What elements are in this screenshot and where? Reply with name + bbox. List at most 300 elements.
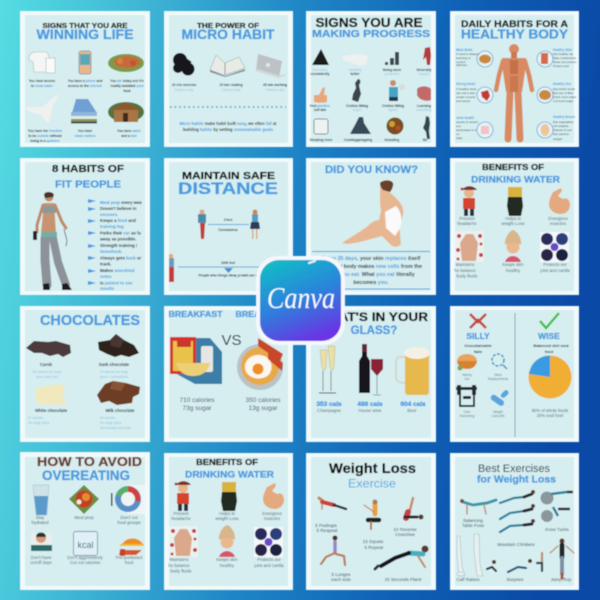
- text: balanced diet: [533, 343, 569, 354]
- captions row three: Sleeping more: [310, 138, 333, 142]
- icon: runner: [423, 116, 430, 139]
- text: plank: 15 Seconds Plank: [384, 577, 422, 582]
- heading: weight loss: Weight Loss: [329, 460, 416, 476]
- icon: food groups plate: [111, 485, 145, 514]
- text: champagne: Champagne: [317, 408, 342, 413]
- icon: open hand: [25, 94, 59, 122]
- captions row two: Feel positive: [310, 104, 330, 108]
- captions: top row: [457, 216, 569, 226]
- captions: upper fads: Meal: [495, 373, 502, 377]
- icon: champagne glasses: [319, 346, 336, 393]
- text: house wine: 498 cals: [357, 401, 383, 408]
- captions: repeat top row: weight Loss: [215, 516, 239, 521]
- icon: meal plate: [69, 485, 99, 514]
- text: habit list: Meal prep every wee: [100, 200, 142, 205]
- text: habit list: excuses.: [100, 212, 118, 217]
- caption row two: You have: [78, 129, 92, 133]
- text: balanced diet: food: [545, 349, 554, 354]
- captions row two: tighter: [389, 108, 398, 112]
- heading: did you know: DID YOU KNOW?: [325, 164, 418, 176]
- captions: exercises: 15 min reading: [219, 83, 243, 87]
- icon: person bottom left: [169, 254, 174, 282]
- icon: headache boy: [460, 186, 477, 216]
- panel: benefits of drinking water, top: [450, 158, 579, 295]
- text: unsustainable fads: Unsustainable: [464, 343, 492, 348]
- text: left column: control: [456, 60, 466, 64]
- text: habit list: Always gets back or: [100, 256, 142, 260]
- text: beer: 604 cals: [400, 401, 426, 408]
- captions: overeating top: food groups: [117, 520, 141, 525]
- caption row one: readily available your: [110, 84, 144, 88]
- text: left calories: 73g sugar: [183, 405, 212, 412]
- text: habit list: training log.: [100, 224, 125, 229]
- heading: avoid overeating: OVEREATING: [42, 468, 130, 483]
- captions: lower fads: [460, 410, 505, 418]
- text: dark chocolate: 74 calories per large: [100, 370, 129, 374]
- caption row one: to clean water: [31, 84, 54, 88]
- icon: milk chocolate: [97, 381, 140, 405]
- text: milk chocolate: Not actually chocolate: [100, 426, 131, 430]
- captions: repeat bottom row: Keeps skin: [216, 557, 238, 562]
- icon: man lifting: [389, 80, 405, 101]
- captions: top row: Energizes: [548, 216, 569, 221]
- icon: body with red cells: [455, 231, 484, 262]
- text: left column: on: [456, 132, 460, 136]
- panel: best exercises: [450, 453, 579, 590]
- text: micro habit note: [179, 121, 277, 132]
- icon: woman at desk: [350, 117, 371, 134]
- captions row three: [310, 138, 427, 142]
- panel: avoid overeating: [20, 452, 150, 590]
- caption row two: to be outside without: [28, 134, 62, 138]
- captions: repeat bottom row: Maintains: [170, 557, 189, 562]
- captions: upper fads: Skinny: [462, 373, 472, 377]
- icon: phone: [79, 51, 91, 74]
- panel: safe distance: [164, 158, 293, 295]
- text: lunges: 5 Lunges: [332, 572, 351, 577]
- icon: weight loss pills: [490, 389, 510, 407]
- icon: person left: [198, 210, 206, 239]
- icon: person in bed: [31, 532, 52, 551]
- distance marker: short: Coronavirus: [218, 228, 238, 232]
- text: left column: [456, 48, 479, 140]
- text: pie legend: 20% soul food: [537, 413, 564, 418]
- text: habit list: track.: [100, 262, 111, 266]
- heading: drinking water repeat: DRINKING WATER: [185, 470, 274, 480]
- captions: top row: weight Loss: [501, 221, 525, 226]
- captions: overeating bottom: Cut out calories: [70, 560, 101, 565]
- heading: healthy body: [461, 19, 568, 42]
- text: unsustainable fads: fads: [474, 349, 483, 354]
- captions: repeat bottom row: Protects our: [257, 557, 281, 562]
- label: vs: VS: [221, 332, 242, 349]
- heading: fit people: FIT PEOPLE: [55, 178, 121, 190]
- icons: organs: [479, 53, 551, 136]
- text: exercise labels: Jump Rop: [551, 577, 572, 582]
- text: right column: Healthy Bones: [553, 115, 575, 119]
- captions: lower fads: Exercising: [460, 414, 475, 418]
- text: left calories: [179, 397, 215, 412]
- captions: overeating top: hydrated: [31, 520, 49, 525]
- text: skin fact: becomes you.: [353, 280, 389, 286]
- figure: balancing table pose: [460, 499, 496, 514]
- captions row three: Including: [385, 138, 399, 142]
- captions row two: self talk: [314, 108, 326, 112]
- text: left calories: 710 calories: [179, 397, 215, 404]
- captions: repeat top row: muscles: [264, 516, 281, 521]
- icon: dancer: [423, 47, 431, 65]
- captions row three: Cooking/prepping: [344, 138, 372, 142]
- text: exercise labels: [456, 577, 572, 582]
- icon: flexed bicep: [549, 188, 570, 214]
- icon: egg and bacon plate: [237, 338, 283, 390]
- icon: water glass: [33, 485, 49, 515]
- captions row one: Being more: [383, 68, 401, 72]
- heading: drinking water: DRINKING WATER: [471, 174, 560, 186]
- caption row one: You have access: [29, 79, 55, 83]
- text: table pose: Table Pose: [462, 523, 485, 528]
- captions: overeating top: Don't cut: [120, 515, 138, 520]
- text: right column: Cut food sugar: [553, 99, 573, 103]
- captions row two: looser: [353, 108, 362, 112]
- icon: woman lifting: [352, 79, 361, 102]
- icon: dumbbells: [173, 53, 194, 76]
- distance marker: long: People who things whay prolaih are sd: [199, 274, 259, 278]
- heading: fit people: [52, 163, 125, 190]
- text: dark chocolate: [99, 362, 130, 379]
- text: mountain climbers: Mountain Climbers: [497, 542, 536, 547]
- text: left column: can eat a lean: [456, 91, 476, 95]
- heading: drinking water: [471, 162, 560, 186]
- figure: knee tucks: [540, 492, 573, 522]
- text: left column: create muscle: [456, 95, 476, 99]
- captions: repeat top row: Prevent: [173, 511, 189, 516]
- text: left column: Joint Health: [456, 116, 474, 120]
- icon: beer mug: [396, 347, 430, 395]
- heading: avoid overeating: HOW TO AVOID: [37, 455, 142, 469]
- icon: joint cells: [540, 232, 569, 262]
- captions row one: better: [350, 72, 360, 76]
- text: left column: Strong Heart: [456, 82, 476, 86]
- icon: laptop: [256, 54, 287, 78]
- caption row two: You have water: [117, 129, 142, 133]
- text: balanced diet: Balanced diet soul: [533, 343, 569, 348]
- captions row three: Be: [423, 138, 427, 142]
- text: habit list: Parks their car as fa: [100, 230, 141, 236]
- text: unsustainable fads: [464, 343, 492, 354]
- caption row one: access to the internet: [68, 84, 103, 88]
- captions: repeat top row: [171, 511, 283, 521]
- distance marker: long: [178, 261, 290, 278]
- distance marker: short: [208, 218, 249, 232]
- figure: plank: [375, 546, 428, 569]
- captions: exercises: [172, 83, 287, 92]
- text: pie legend: [532, 408, 568, 418]
- illustration: seated woman: [342, 180, 403, 247]
- icon: thumbs up: [314, 87, 327, 103]
- chart: whole foods pie: [528, 356, 572, 398]
- heading: silly: SILLY: [466, 331, 490, 341]
- panel: healthy body: [450, 11, 579, 147]
- captions row two: Clothes fitting: [346, 104, 368, 108]
- icon: served dome: [119, 538, 144, 556]
- heading: micro habit: THE POWER OF: [197, 21, 260, 30]
- heading: chocolates: CHOCOLATES: [40, 313, 140, 329]
- text: right column: Eat calcium: [553, 132, 569, 136]
- text: knee tucks: Knee Tucks: [545, 527, 570, 532]
- figure: burpees: [487, 553, 542, 572]
- text: left column: A mind is always: [456, 52, 479, 56]
- icon: body repeat: [169, 526, 198, 557]
- text: white chocolate: White chocolate: [35, 408, 68, 413]
- text: right column: Eat healthy fat: [553, 52, 573, 56]
- caption row two: [28, 129, 142, 143]
- captions: overeating top: Stay: [36, 515, 45, 520]
- text: reverse crunches: [393, 527, 417, 537]
- captions: top row: headache: [457, 221, 477, 226]
- captions: top row: Prevent: [459, 216, 475, 221]
- text: carob: Carob: [40, 362, 52, 367]
- captions row two: something: [417, 108, 432, 112]
- logo wordmark: Canva: [267, 280, 335, 315]
- captions: repeat top row: Energizes: [262, 511, 283, 516]
- captions: exercises: 3 times a day: [222, 88, 241, 92]
- panel: what's in your glass: [306, 306, 436, 442]
- panel: micro habit: [164, 11, 293, 147]
- text: table pose: Balancing: [463, 518, 483, 523]
- icon: dark chocolate: [98, 334, 139, 357]
- captions: exercises: 10 min exercise: [172, 83, 196, 87]
- text: left column: stillness: [456, 63, 467, 67]
- heading: making progress: SIGNS YOU ARE: [316, 16, 422, 30]
- text: habit list: Is patient to see: [100, 280, 133, 286]
- captions: top row: muscles: [550, 221, 567, 226]
- text: right column: Eat vegetables: [553, 120, 574, 124]
- text: left column: you: [456, 124, 461, 128]
- figure: pushups: [319, 498, 346, 509]
- panel: breakfast vs: [164, 306, 293, 442]
- figure: jump rope: [550, 538, 574, 578]
- panel: chocolates: [20, 306, 150, 442]
- icon: kcal: kcal: [77, 540, 94, 550]
- icon: meal replacement loop: [492, 354, 507, 369]
- captions: bottom row: healthy: [506, 268, 521, 273]
- panel: fit people: [20, 158, 150, 295]
- captions: bottom row: [454, 262, 570, 278]
- icon: food plate: [108, 54, 144, 72]
- heading: best exercises: for Weight Loss: [477, 474, 556, 486]
- icon: joint cells repeat: [254, 527, 283, 557]
- heading: wise: WISE: [538, 331, 560, 341]
- captions: lower fads: Loss pills: [491, 414, 505, 418]
- text: reverse crunches: Crunches: [395, 532, 416, 537]
- text: exercise labels: Burpees: [507, 577, 524, 582]
- text: right column: Vitamin D sun: [553, 128, 572, 132]
- text: white chocolate: 67 calories: [28, 416, 44, 420]
- text: table pose: [462, 518, 485, 528]
- text: habit list: Doesn't believe in: [100, 206, 137, 211]
- icon: brain: [417, 86, 431, 101]
- icon: bicep repeat: [263, 483, 284, 509]
- captions: overeating bottom: Pre-portioned: [116, 555, 143, 560]
- text: right column: Healthy Skin: [553, 48, 572, 52]
- captions: bottom row: body fluids: [456, 274, 478, 278]
- text: left column: daily: [456, 136, 463, 140]
- text: milk chocolate: 56 calories: [100, 416, 116, 420]
- icon: waist repeat: [221, 482, 237, 511]
- captions: top row: Helps in: [505, 216, 521, 221]
- icon: wine bottle and glass: [359, 344, 383, 395]
- heading: what's in your glass: GLASS?: [351, 325, 397, 337]
- captions: overeating bottom: Don't have: [31, 555, 52, 560]
- icon: folded clothes: [71, 99, 97, 124]
- icon: headache boy repeat: [174, 481, 191, 511]
- text: squats: 15 Squats: [363, 539, 384, 544]
- icon: scale: [314, 119, 328, 134]
- icon: house: [108, 102, 144, 122]
- text: right calories: [245, 397, 281, 412]
- text: champagne: [316, 401, 342, 413]
- heading: best exercises: Best Exercises: [478, 463, 550, 475]
- caption row two: and a bed: [121, 134, 137, 138]
- text: habit list: Makes anecdotal: [100, 268, 134, 273]
- caption row one: You have a phone and: [68, 79, 102, 83]
- text: white chocolate: Per large piece: [28, 421, 50, 425]
- text: left column: learning to: [456, 56, 471, 60]
- icon: red cross: [470, 314, 486, 328]
- heading: healthy body: HEALTHY BODY: [461, 26, 568, 42]
- panel: making progress: [306, 11, 436, 147]
- captions: repeat top row: headache: [171, 516, 191, 521]
- text: right column: Wear sun protect: [553, 60, 577, 64]
- illustration: woman with jump rope: [33, 192, 72, 290]
- text: exercise labels: Calf Raises: [456, 577, 480, 582]
- panel: winning life: [20, 11, 150, 147]
- text: beer: Beer: [407, 408, 417, 413]
- captions row two: Learning: [417, 104, 431, 108]
- text: right column: Lift weights: [553, 124, 569, 128]
- figure: squats: [364, 500, 379, 529]
- captions: bottom row: Maintains: [456, 262, 475, 267]
- icon: woman with towel: [505, 230, 521, 262]
- text: house wine: [357, 401, 383, 413]
- caption row two: clean clothes: [75, 134, 96, 138]
- captions: repeat top row: Helps in: [219, 511, 235, 516]
- text: carob: 56 calories per large: [33, 370, 62, 374]
- text: habit list: notes: [100, 274, 112, 279]
- heading: fit people: 8 HABITS OF: [52, 163, 125, 175]
- figure: mountain climbers: [500, 490, 535, 532]
- text: pie legend: 80% of whole foods: [532, 408, 568, 413]
- heading: making progress: [312, 16, 430, 40]
- distance marker: long: 1000 feet: [221, 261, 236, 265]
- captions: repeat bottom row: [168, 557, 284, 574]
- captions: upper fads: [462, 373, 509, 381]
- panel: silly vs wise: [450, 306, 579, 442]
- captions: bottom row: Protects our: [543, 262, 567, 267]
- text: skin fact: food you eat. What you eat literally: [327, 272, 415, 278]
- text: house wine: House wine: [359, 408, 382, 413]
- icon: green check: [540, 313, 559, 328]
- text: habit list: timeshock.: [100, 249, 122, 254]
- captions: exercises: 45 min working: [263, 83, 287, 87]
- captions: bottom row: Keeps skin: [502, 262, 524, 267]
- heading: making progress: MAKING PROGRESS: [312, 28, 430, 40]
- text: habit list: [100, 200, 142, 291]
- text: habit list: Keeps a food and: [100, 218, 136, 223]
- text: reverse crunches: 10 Reverse: [393, 527, 417, 532]
- captions: overeating bottom: on/off days: [30, 560, 53, 565]
- icon: white chocolate: [35, 384, 67, 405]
- caption row one: You ate today and it's: [110, 79, 144, 83]
- heading: safe distance: MAINTAIN SAFE: [182, 171, 275, 182]
- text: carob: [33, 362, 62, 379]
- distance marker: short: 3 feet: [224, 218, 233, 222]
- text: habit list: away as possible.: [100, 236, 136, 242]
- icon: white cloth: [343, 54, 368, 66]
- text: dark chocolate: piece + antioxidants: [100, 375, 129, 379]
- panel: did you know: [306, 158, 436, 295]
- captions: lower fads: Weight: [493, 410, 503, 414]
- heading: drinking water: BENEFITS OF: [482, 162, 544, 172]
- captions: overeating bottom: [30, 555, 143, 565]
- icon: carob: [26, 341, 71, 357]
- text: right column: [553, 48, 577, 141]
- icon: skinny tea: [457, 354, 477, 370]
- text: left column: and stress: [456, 99, 471, 103]
- heading: avoid overeating: [20, 452, 150, 483]
- text: left column: A healthy heart: [456, 87, 477, 91]
- text: beer: [400, 401, 426, 413]
- heading: safe distance: DISTANCE: [178, 180, 278, 198]
- heading: winning life: WINNING LIFE: [36, 26, 134, 42]
- captions row two: [310, 104, 432, 112]
- text: milk chocolate: Per large piece: [100, 421, 122, 425]
- text: lunges: [331, 572, 351, 582]
- heading: winning life: SIGNS THAT YOU ARE: [42, 21, 128, 30]
- text: lunges: each side: [331, 577, 351, 582]
- icon: barbell station: [456, 385, 477, 407]
- captions row one: Generally: [416, 68, 432, 72]
- heading: breakfast right: BREAKFAST: [236, 310, 290, 319]
- heading: best exercises: [477, 463, 556, 486]
- text: right calories: 350 calories: [245, 397, 281, 404]
- text: right column: weight: [553, 137, 562, 141]
- text: milk chocolate: Milk chocolate: [106, 408, 135, 413]
- captions: repeat bottom row: healthy: [220, 563, 235, 568]
- text: left column: advantage to it: [456, 128, 476, 132]
- text: left column: squats & stretch: [456, 120, 478, 124]
- text: carob: piece dairy free: [36, 375, 58, 379]
- text: right column: Eat lots of fiber: [553, 91, 574, 95]
- caption row one: food: [123, 89, 131, 93]
- text: right calories: 13g sugar: [249, 405, 278, 412]
- text: pushups: [315, 523, 338, 533]
- captions row one: [310, 68, 432, 76]
- text: pushups: 5 Respeat: [317, 528, 338, 533]
- heading: drinking water repeat: BENEFITS OF: [196, 457, 258, 467]
- text: habit list: results: [100, 286, 115, 291]
- icon: waist with tape: [507, 187, 523, 216]
- heading: safe distance: [178, 171, 278, 198]
- captions: bottom row: he balance: [454, 268, 476, 273]
- captions: repeat bottom row: joint and cartila: [253, 563, 284, 568]
- text: right column: Healthy Gut: [553, 82, 572, 86]
- panel: weight loss exercise: [306, 453, 436, 590]
- heading: drinking water repeat: [185, 457, 274, 480]
- heading: what's in your glass: [316, 312, 429, 337]
- text: skin fact: [320, 256, 422, 286]
